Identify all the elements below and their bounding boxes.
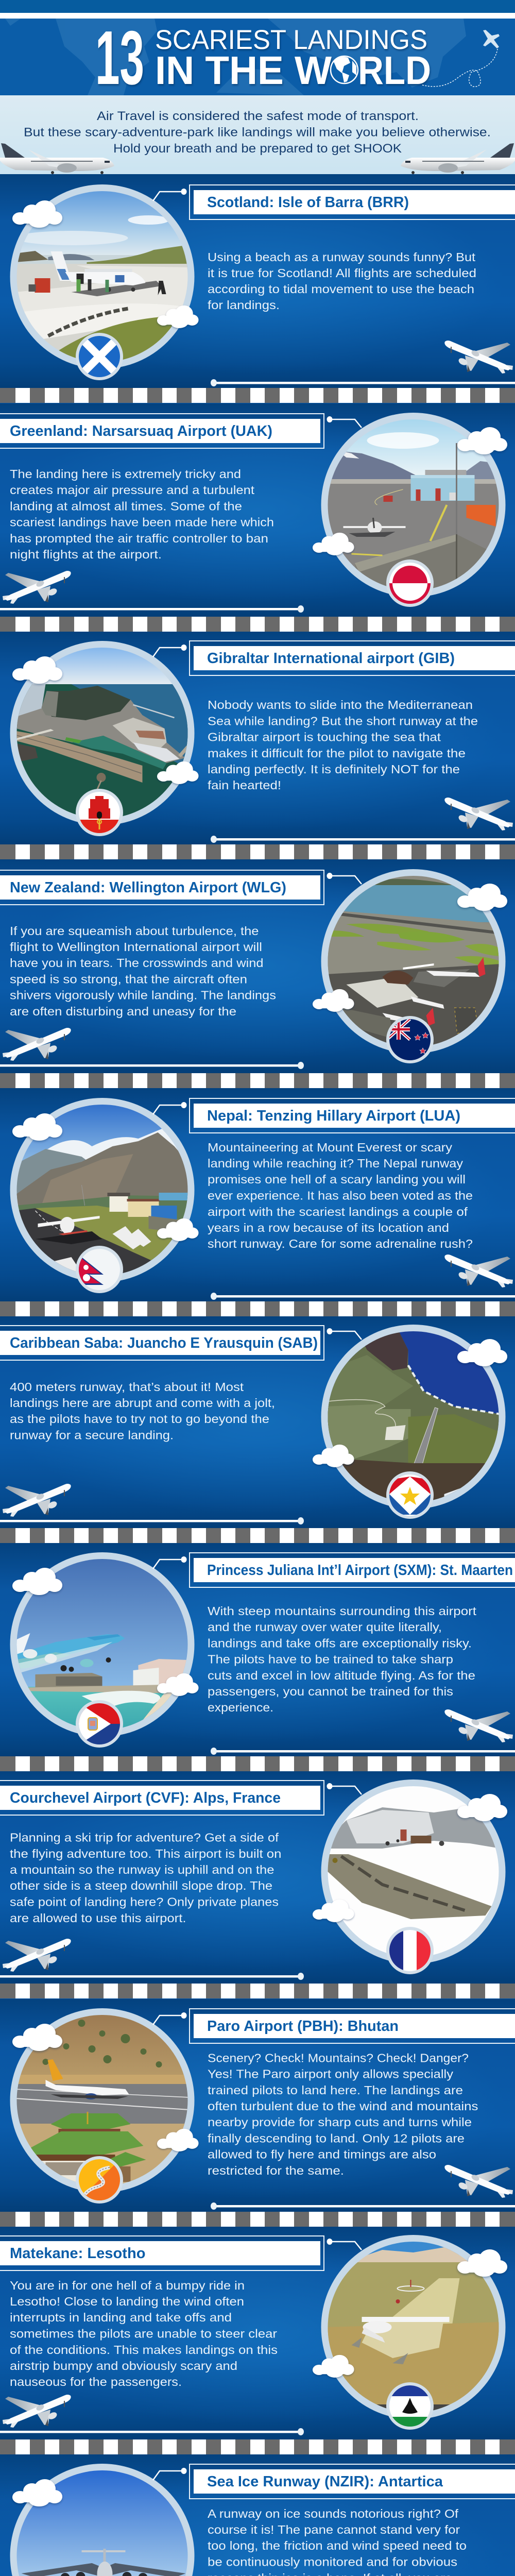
divider line <box>0 2428 304 2435</box>
runway strip <box>0 2212 515 2227</box>
icon: plane <box>444 798 513 831</box>
text: Caribbean Saba <box>10 1380 275 1442</box>
intro panel <box>0 95 515 174</box>
text: Scotland: Using a beach as a runway sounds funny? But <box>208 250 475 264</box>
divider line <box>211 1748 515 1755</box>
heading: Bhutan <box>153 2009 515 2043</box>
panel: Gibraltar <box>10 641 515 843</box>
flag: St. Maarten <box>76 1700 123 1748</box>
text: Nepal: years in a row because of its location and <box>208 1221 449 1234</box>
text: Bhutan: Yes! The Paro airport only allows specially <box>208 2067 453 2080</box>
heading: New Zealand: New Zealand: Wellington Airport (WLG) <box>10 879 286 896</box>
panel: Antarctica <box>10 2464 515 2576</box>
heading: St. Maarten <box>153 1553 515 1587</box>
runway strip <box>0 388 515 403</box>
text: Greenland <box>10 467 274 561</box>
text: Greenland: The landing here is extremely tricky and <box>10 467 241 481</box>
text: Courchevel: are allowed to use this airport. <box>10 1911 186 1925</box>
text: Antarctica: be continuously monitored and for obvious <box>208 2555 457 2569</box>
icon: cloud top <box>457 884 507 911</box>
text: New Zealand <box>10 924 276 1018</box>
flag: New Zealand <box>386 1016 434 1063</box>
text: Lesotho: nauseous for the passengers. <box>10 2375 182 2388</box>
title text: IN THE W <box>155 48 332 93</box>
text: Caribbean Saba: landings here are abrupt and come with a jolt, <box>10 1396 275 1410</box>
photo: Princess Juliana <box>10 1552 195 1737</box>
photo: Barra beach <box>10 184 195 369</box>
text: Nepal <box>208 1141 473 1250</box>
icon: cloud top <box>12 200 62 228</box>
text: New Zealand: speed is so strong, that the aircraft often <box>10 973 247 986</box>
photo: Paro <box>10 2008 195 2193</box>
text: Courchevel: the flying adventure too. This airport is built on <box>10 1847 281 1860</box>
divider line <box>211 836 515 843</box>
text: Greenland: night flights at the airport. <box>10 548 162 561</box>
icon: cloud bottom <box>313 2355 354 2378</box>
text: Nepal: short runway. Care for some adrenaline rush? <box>208 1237 473 1250</box>
icon: cloud bottom <box>157 1218 199 1241</box>
icon: cloud bottom <box>157 761 199 784</box>
text: Gibraltar <box>208 698 478 792</box>
text: St. Maarten: landings and take offs are exceptionally risky. <box>208 1636 472 1650</box>
flag: France <box>386 1927 434 1974</box>
icon: cloud bottom <box>157 306 199 328</box>
text: Courchevel: a mountain so the runway is uphill and on the <box>10 1863 274 1876</box>
flag: Gibraltar <box>76 789 123 836</box>
heading: Greenland: Greenland: Narsarsuaq Airport (UAK) <box>10 423 272 439</box>
text: Gibraltar: landing perfectly. It is definitely NOT for the <box>208 762 460 776</box>
panel: Courchevel <box>0 1780 507 1980</box>
text: St. Maarten: cuts and excel in low altitude flying. As for the <box>208 1669 475 1682</box>
title text <box>95 15 431 100</box>
text: Nepal: airport with the scariest landings a couple of <box>208 1205 468 1218</box>
runway strip <box>0 1984 515 1998</box>
runway strip <box>0 1528 515 1543</box>
photo: Wellington <box>321 869 506 1054</box>
icon: cloud top <box>457 427 507 454</box>
panel: New Zealand <box>0 869 507 1069</box>
divider line <box>0 1517 304 1524</box>
text: St. Maarten: With steep mountains surrounding this airport <box>208 1604 477 1618</box>
runway strip <box>0 844 515 859</box>
photo: Gibraltar <box>10 641 195 825</box>
text: New Zealand: have you in tears. The crosswinds and wind <box>10 956 264 970</box>
heading: Greenland <box>0 414 362 448</box>
text: Lesotho: You are in for one hell of a bumpy ride in <box>10 2279 245 2292</box>
panel: Scotland <box>10 184 515 386</box>
title text: RLD <box>358 48 431 93</box>
intro text <box>24 109 491 156</box>
divider line <box>0 605 304 613</box>
text: Greenland: landing at almost all times. Some of the <box>10 500 242 513</box>
icon: cloud top <box>12 656 62 684</box>
heading: Courchevel <box>0 1781 362 1815</box>
divider line <box>211 1293 515 1300</box>
flag: Scotland <box>76 333 123 380</box>
text: Lesotho <box>10 2279 278 2388</box>
panel: Bhutan <box>10 2008 515 2210</box>
text: Bhutan: trained pilots to land here. The landings are <box>208 2083 463 2097</box>
text: Caribbean Saba: runway for a secure landing. <box>10 1428 174 1442</box>
text: Nepal: Mountaineering at Mount Everest or scary <box>208 1141 452 1154</box>
icon: cloud top <box>12 1113 62 1141</box>
photo: Sea Ice Runway <box>10 2464 195 2576</box>
text: Greenland: has prompted the air traffic controller to ban <box>10 532 268 545</box>
icon: airliner left <box>0 143 114 174</box>
text: St. Maarten <box>208 1604 477 1714</box>
text: Lesotho: airstrip bumpy and obviously scary and <box>10 2359 237 2372</box>
flag: Lesotho <box>386 2382 434 2430</box>
text: Bhutan: often turbulent due to the wind and mountains <box>208 2099 478 2113</box>
heading: Lesotho: Matekane: Lesotho <box>10 2245 145 2262</box>
icon: plane <box>444 1255 513 1287</box>
divider line <box>0 1973 304 1980</box>
text: New Zealand: flight to Wellington International airport will <box>10 940 262 954</box>
text: Courchevel: safe point of landing here? Only private planes <box>10 1895 279 1908</box>
text: St. Maarten: The pilots have to be trained to take sharp <box>208 1653 453 1666</box>
text: New Zealand: are often disturbing and uneasy for the <box>10 1005 236 1018</box>
text: New Zealand: If you are squeamish about turbulence, the <box>10 924 259 938</box>
heading: Caribbean Saba: Caribbean Saba: Juancho E Yrausquin (SAB) <box>10 1335 318 1351</box>
icon: cloud top <box>457 1339 507 1366</box>
heading: Scotland <box>153 185 515 219</box>
text: Courchevel <box>10 1831 281 1925</box>
icon: cloud bottom <box>313 989 354 1012</box>
icon: plane <box>3 571 71 604</box>
photo: Matekane <box>321 2235 506 2419</box>
flag: Saba <box>386 1471 434 1519</box>
heading: Gibraltar: Gibraltar International airport (GIB) <box>207 650 455 667</box>
divider line <box>0 1062 304 1069</box>
text: Courchevel: other side is a steep downhill slope drop. The <box>10 1879 272 1892</box>
text: Greenland: creates major air pressure and a turbulent <box>10 483 255 497</box>
runway strip <box>0 1073 515 1088</box>
runway strip <box>0 1756 515 1771</box>
icon: plane <box>3 1028 71 1061</box>
text: Bhutan: allowed to fly here and timings are also <box>208 2147 436 2161</box>
icon: cloud top <box>457 2249 507 2277</box>
heading: Bhutan: Paro Airport (PBH): Bhutan <box>207 2018 399 2035</box>
icon: plane <box>3 2395 71 2428</box>
text: Lesotho: sometimes the pilots are unable to steer clear <box>10 2327 277 2340</box>
heading: Lesotho <box>0 2236 362 2270</box>
text: Nepal: ever experience. It has also been voted as the <box>208 1189 473 1202</box>
heading: Caribbean Saba <box>0 1326 362 1360</box>
icon: cloud bottom <box>313 1900 354 1922</box>
text: Antarctica <box>208 2507 478 2576</box>
icon: plane <box>3 1939 71 1972</box>
icon: cloud bottom <box>157 2129 199 2151</box>
title text: 13 <box>95 15 144 100</box>
panel: Lesotho <box>0 2235 507 2435</box>
text: Antarctica: too long, the friction and wind speed need to <box>208 2539 467 2552</box>
text: New Zealand: shivers vigorously while landing. The landings <box>10 988 276 1002</box>
photo: Narsarsuaq <box>321 413 506 598</box>
text: Courchevel: Planning a ski trip for adventure? Get a side of <box>10 1831 279 1844</box>
flag: Nepal <box>76 1246 123 1293</box>
text: Gibraltar: makes it difficult for the pilot to navigate the <box>208 747 466 760</box>
runway strip <box>0 1301 515 1316</box>
text: Lesotho: Lesotho! Close to landing the wind often <box>10 2295 244 2308</box>
header: top bands <box>0 0 515 19</box>
text: St. Maarten: passengers, you cannot be trained for this <box>208 1685 453 1698</box>
photo: Courchevel <box>321 1780 506 1964</box>
panel: Nepal <box>10 1098 515 1300</box>
icon: cloud top <box>457 1794 507 1821</box>
text: Antarctica: course it is! The pane cannot stand very for <box>208 2523 460 2536</box>
text: Lesotho: of the conditions. This makes landings on this <box>10 2343 278 2357</box>
text: Gibraltar: Sea while landing? But the short runway at the <box>208 714 478 727</box>
text: Scotland: according to tidal movement to use the beach <box>208 282 474 296</box>
panel: St. Maarten <box>10 1552 515 1755</box>
panel: Greenland <box>0 413 507 613</box>
icon: cloud bottom <box>157 1673 199 1696</box>
intro text: Hold your breath and be prepared to get SHOOK <box>113 142 402 156</box>
text: Lesotho: interrupts in landing and take offs and <box>10 2311 232 2324</box>
flag: Greenland <box>386 560 434 607</box>
title text: SCARIEST LANDINGS <box>155 25 427 55</box>
runway strip <box>0 617 515 632</box>
text: Bhutan <box>208 2052 478 2177</box>
text: Bhutan: nearby provide for sharp cuts and turns while <box>208 2115 472 2129</box>
intro text: But these scary-adventure-park like landings will make you believe otherwise. <box>24 126 491 139</box>
text: Scotland: for landings. <box>208 298 280 312</box>
icon: airliner right <box>401 143 515 174</box>
divider line <box>211 2202 515 2210</box>
text: St. Maarten: and the runway over water quite literally, <box>208 1620 442 1634</box>
text: Nepal: promises one hell of a scary landing you will <box>208 1173 466 1186</box>
text: Scotland: it is true for Scotland! All flights are scheduled <box>208 266 476 280</box>
runway strip <box>0 2439 515 2454</box>
heading: Scotland: Scotland: Isle of Barra (BRR) <box>207 194 409 211</box>
text: Bhutan: finally descending to land. Only 12 pilots are <box>208 2132 465 2145</box>
icon: paper plane and dashed flight path <box>422 30 500 87</box>
photo: Saba <box>321 1325 506 1509</box>
header: title panel <box>0 15 515 100</box>
icon: plane <box>444 2165 513 2198</box>
heading: New Zealand <box>0 870 362 905</box>
icon: cloud top <box>12 1568 62 1595</box>
icon: plane <box>444 1709 513 1742</box>
text: Greenland: scariest landings have been made here which <box>10 515 274 529</box>
text: Gibraltar: Gibraltar airport is touching the sea that <box>208 731 441 744</box>
panel: Caribbean Saba <box>0 1325 507 1524</box>
text: Nepal: landing while reaching it? The Nepal runway <box>208 1157 463 1170</box>
heading: Nepal: Nepal: Tenzing Hillary Airport (LUA) <box>207 1108 460 1124</box>
divider line <box>211 379 515 386</box>
icon: plane <box>444 341 513 374</box>
icon: plane <box>3 1484 71 1517</box>
text: Caribbean Saba: as the pilots have to try not to go beyond the <box>10 1412 269 1426</box>
photo: Lukla <box>10 1098 195 1282</box>
icon: cloud bottom <box>313 533 354 555</box>
heading: Nepal <box>153 1098 515 1133</box>
heading: Gibraltar <box>153 641 515 675</box>
text: Caribbean Saba: 400 meters runway, that’s about it! Most <box>10 1380 244 1394</box>
text: St. Maarten: experience. <box>208 1701 273 1714</box>
text: Antarctica: A runway on ice sounds notorious right? Of <box>208 2507 459 2520</box>
icon: cloud bottom <box>313 1445 354 1467</box>
text: Bhutan: restricted for the same. <box>208 2164 344 2177</box>
flag: Bhutan <box>76 2156 123 2204</box>
intro text: Air Travel is considered the safest mode of transport. <box>97 109 419 123</box>
text: Scotland <box>208 250 476 312</box>
text: Bhutan: Scenery? Check! Mountains? Check! Danger? <box>208 2052 469 2065</box>
text: Gibraltar: fain hearted! <box>208 778 281 792</box>
icon: globe as letter O: O <box>332 48 363 93</box>
heading: Antarctica: Sea Ice Runway (NZIR): Antartica <box>207 2473 443 2490</box>
icon: cloud top <box>12 2024 62 2051</box>
text: Gibraltar: Nobody wants to slide into the Mediterranean <box>208 698 473 711</box>
world map backdrop <box>5 19 466 95</box>
heading: Antarctica <box>153 2464 515 2499</box>
heading: Courchevel: Courchevel Airport (CVF): Alps, France <box>10 1790 281 1806</box>
icon: cloud top <box>12 2479 62 2506</box>
